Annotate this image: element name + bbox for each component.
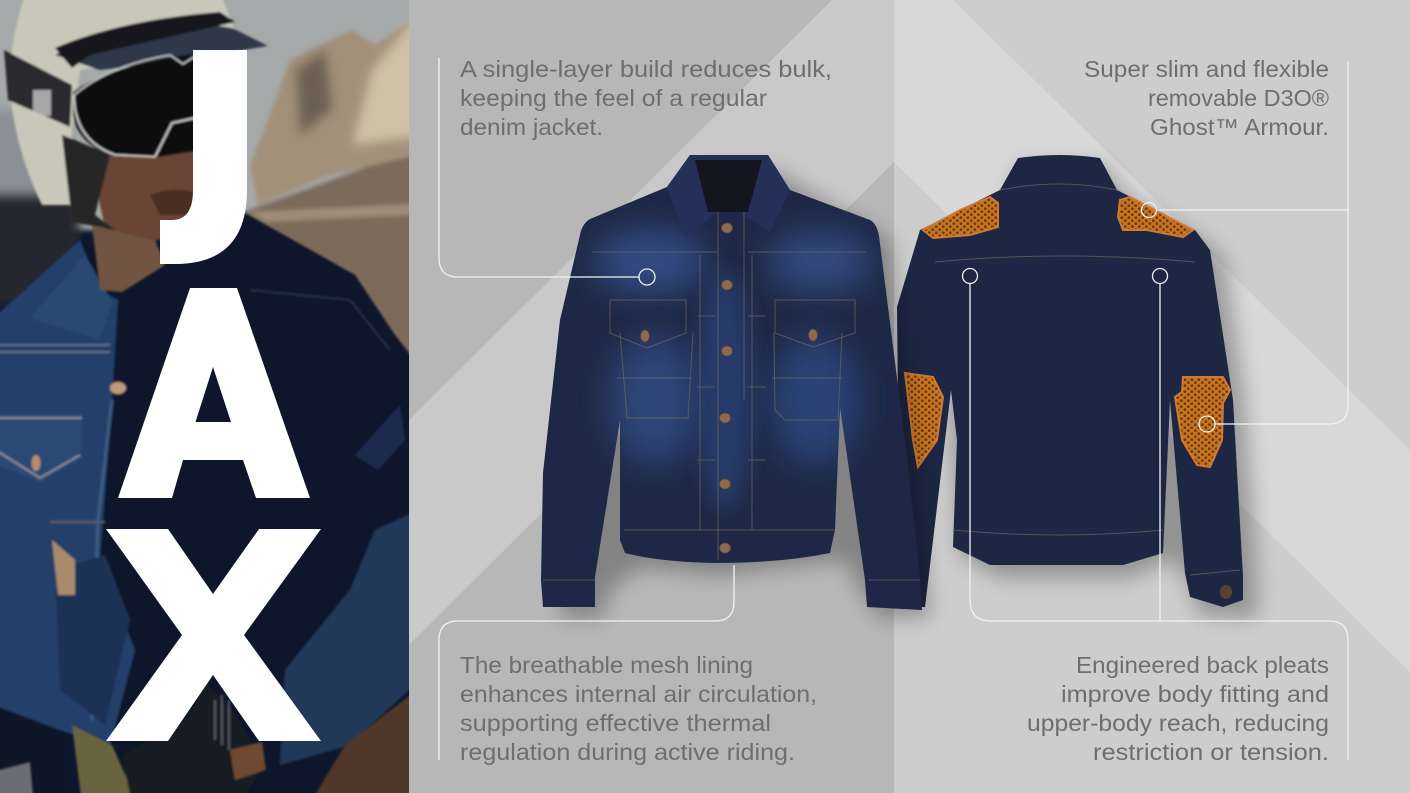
text: Ghost™ Armour. bbox=[1150, 114, 1329, 140]
text: Super slim and flexible bbox=[1084, 56, 1329, 82]
text: keeping the feel of a regular bbox=[460, 85, 767, 111]
leader line bbox=[439, 565, 734, 760]
callout: single-layer build bbox=[439, 56, 832, 285]
letter A bbox=[118, 288, 310, 498]
front jacket body bbox=[541, 155, 922, 610]
text: upper-body reach, reducing bbox=[1027, 710, 1329, 736]
denim fade highlights bbox=[595, 230, 872, 510]
photo: ground, trousers and glove bbox=[0, 680, 430, 793]
marker: shoulder bbox=[1142, 202, 1156, 218]
panel: left background bbox=[409, 0, 894, 793]
marker: elbow bbox=[1199, 416, 1215, 432]
leader lines bbox=[1157, 62, 1348, 424]
callout: back pleats bbox=[962, 268, 1348, 765]
text: regulation during active riding. bbox=[460, 739, 795, 765]
letter X bbox=[106, 529, 321, 741]
photo: neck and face bbox=[91, 148, 193, 294]
front jacket shadow bbox=[560, 170, 930, 618]
photo: jacket body bbox=[0, 213, 430, 793]
text: denim jacket. bbox=[460, 114, 603, 140]
text: Engineered back pleats bbox=[1076, 652, 1329, 678]
marker: right pleat bbox=[1152, 268, 1168, 284]
title: JAX vertical letters bbox=[106, 50, 321, 741]
buttons bbox=[640, 223, 818, 553]
text: enhances internal air circulation, bbox=[460, 681, 817, 707]
text: The breathable mesh lining bbox=[460, 652, 753, 678]
text: restriction or tension. bbox=[1093, 739, 1329, 765]
collar bbox=[667, 155, 790, 238]
armour: left shoulder bbox=[923, 197, 998, 238]
text: removable D3O® bbox=[1148, 85, 1329, 111]
leader line bbox=[439, 58, 639, 277]
callout: D3O armour bbox=[1084, 56, 1348, 432]
text: improve body fitting and bbox=[1061, 681, 1329, 707]
jacket back view bbox=[897, 155, 1258, 618]
leader lines bbox=[970, 284, 1348, 760]
armour: left elbow bbox=[905, 373, 943, 467]
callout: breathable mesh bbox=[439, 565, 817, 765]
letter J bbox=[160, 50, 247, 264]
jacket front view bbox=[541, 155, 930, 618]
text: A single-layer build reduces bulk, bbox=[460, 56, 832, 82]
stitching bbox=[543, 212, 920, 580]
back jacket shadow bbox=[950, 165, 1258, 618]
panel: right background bbox=[894, 0, 1410, 793]
armour: right shoulder bbox=[1118, 197, 1193, 237]
photo: rider in denim jacket bbox=[0, 0, 440, 793]
photo backdrop: sky, cliffs and road bbox=[0, 0, 440, 360]
marker bbox=[639, 269, 655, 285]
text: supporting effective thermal bbox=[460, 710, 771, 736]
photo: helmet bbox=[4, 0, 268, 230]
armour: right elbow bbox=[1175, 377, 1230, 467]
back jacket body bbox=[897, 155, 1243, 607]
marker: left pleat bbox=[962, 268, 978, 284]
